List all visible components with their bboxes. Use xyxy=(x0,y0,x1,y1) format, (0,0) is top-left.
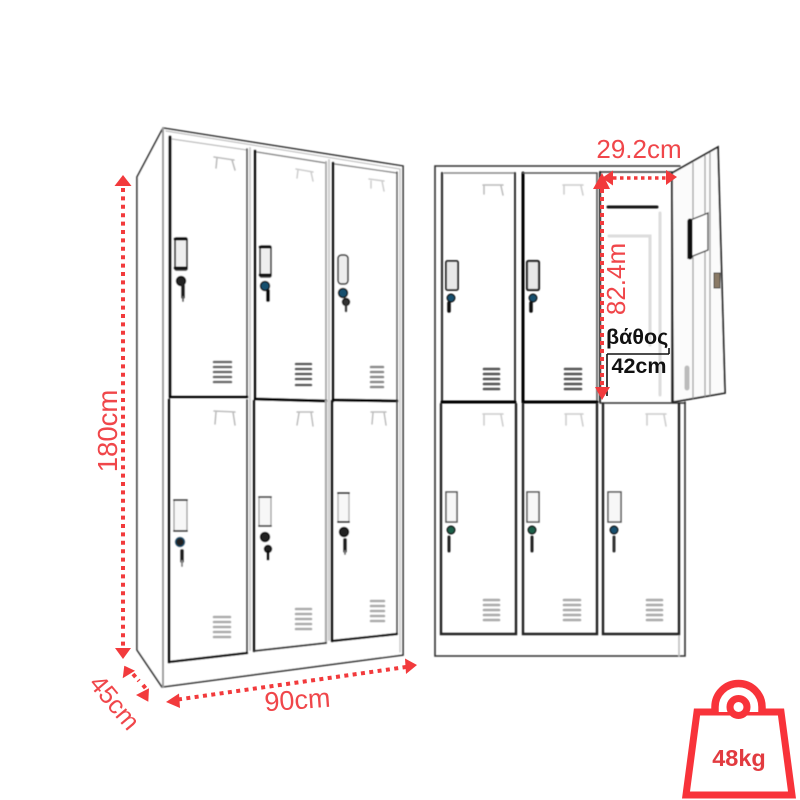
depth label: βάθος 42cm: βάθος xyxy=(606,325,668,349)
dimension: width 90cm xyxy=(166,658,417,717)
left locker: closed, three-column cabinet xyxy=(137,128,403,687)
door: bottom middle xyxy=(523,404,597,634)
cabinet body outline xyxy=(435,166,685,656)
door: bottom left xyxy=(441,404,516,634)
open door xyxy=(672,147,725,402)
dimension: height 180cm: 180cm xyxy=(92,390,123,472)
dimension: compartment height 82.4m xyxy=(593,173,631,400)
door: bottom right xyxy=(332,401,397,641)
door: bottom left xyxy=(169,400,247,662)
door: top middle xyxy=(255,151,326,401)
dimension: height 180cm xyxy=(92,175,132,659)
dimension: compartment height 82.4m: 82.4m xyxy=(601,243,631,315)
depth label: βάθος 42cm xyxy=(606,325,669,396)
dimension: compartment width 29.2cm xyxy=(596,134,682,186)
door: top right xyxy=(333,163,397,401)
door: bottom right xyxy=(603,404,679,634)
depth label: βάθος 42cm: 42cm xyxy=(612,354,666,378)
door: bottom middle xyxy=(254,401,326,651)
door: top middle xyxy=(523,173,597,402)
dimension: compartment width 29.2cm: 29.2cm xyxy=(596,134,682,164)
door: top left xyxy=(170,137,247,397)
cabinet body outline xyxy=(137,128,403,687)
right locker: one door open xyxy=(435,147,725,656)
dimension: depth 45cm: 45cm xyxy=(83,670,145,736)
icon: weight 48kg: 48kg xyxy=(712,745,766,771)
icon: weight 48kg xyxy=(686,684,792,795)
dimension: width 90cm: 90cm xyxy=(263,683,331,717)
door: top left xyxy=(442,173,515,402)
open compartment interior xyxy=(600,172,685,403)
